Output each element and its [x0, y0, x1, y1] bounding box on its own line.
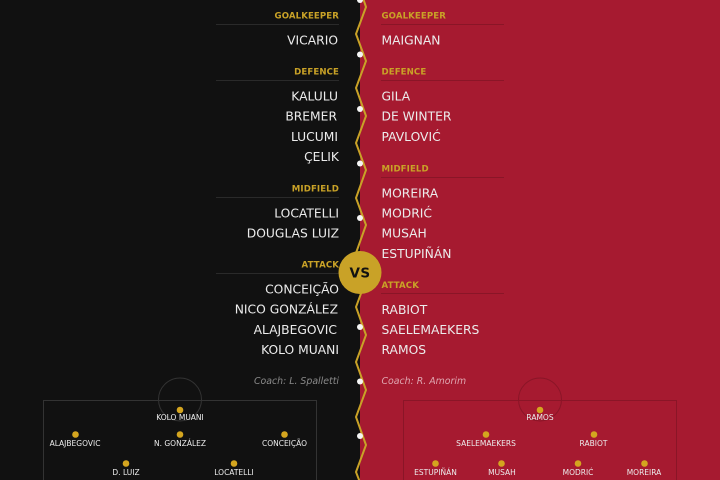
player marker: Ramos: RAMOS	[526, 413, 554, 422]
player marker: D. Luiz: D. LUIZ	[112, 468, 140, 477]
players: right midfield	[382, 186, 451, 261]
players: left defence	[285, 90, 340, 164]
players: right attack: RAMOS	[382, 343, 426, 357]
players: right attack: RABIOT	[382, 303, 428, 317]
player marker: Saelemaekers: SAELEMAEKERS	[456, 439, 516, 448]
players: left defence: LUCUMI	[291, 130, 338, 144]
coach: left: Coach: L. Spalletti	[254, 376, 339, 387]
left team lineup list	[216, 12, 340, 387]
VS badge: VS	[350, 266, 370, 282]
players: right midfield: MOREIRA	[382, 186, 439, 200]
players: right defence: GILA	[382, 90, 411, 104]
players: right attack: SAELEMAEKERS	[382, 323, 480, 337]
heading: defence right: DEFENCE	[382, 68, 426, 78]
player marker: Moreira	[627, 460, 662, 477]
players: right attack	[382, 303, 480, 357]
players: left defence: KALULU	[291, 90, 338, 104]
heading: attack right: ATTACK	[382, 281, 419, 291]
player marker: Estupiñán	[414, 460, 457, 477]
players: left midfield	[247, 206, 339, 240]
player marker: Musah	[488, 460, 516, 477]
player: Maignan: MAIGNAN	[382, 34, 440, 48]
player marker: Kolo Muani: KOLO MUANI	[156, 413, 204, 422]
players: right midfield: MODRIĆ	[382, 206, 432, 220]
heading: goalkeeper left: GOALKEEPER	[275, 12, 339, 22]
player marker: Musah: MUSAH	[488, 468, 516, 477]
VS badge	[338, 251, 382, 294]
players: left attack: KOLO MUANI	[261, 343, 339, 357]
zigzag centre divider	[356, 0, 366, 480]
player marker: Rabiot: RABIOT	[580, 439, 608, 448]
player marker: Moreira: MOREIRA	[627, 468, 662, 477]
players: left attack: ALAJBEGOVIC	[254, 323, 337, 337]
players: left attack: NICO GONZÁLEZ	[235, 302, 338, 316]
player marker: Rabiot	[580, 431, 608, 448]
heading: midfield left: MIDFIELD	[292, 184, 339, 194]
player marker: Locatelli	[214, 460, 254, 477]
players: left midfield: LOCATELLI	[274, 206, 339, 220]
player marker: Conceição	[262, 431, 307, 448]
right formation pitch	[404, 378, 676, 480]
player marker: N. González: N. GONZÁLEZ	[154, 439, 206, 448]
player marker: Saelemaekers	[456, 431, 516, 448]
players: right defence	[382, 90, 452, 144]
player marker: Conceição: CONCEIÇÃO	[262, 439, 307, 448]
player marker: D. Luiz	[112, 460, 140, 477]
players: right defence: DE WINTER	[382, 110, 452, 124]
players: right midfield: ESTUPIÑÁN	[382, 246, 451, 261]
heading: defence left: DEFENCE	[294, 68, 339, 78]
player: Vicario: VICARIO	[287, 34, 338, 48]
player marker: Modrić	[563, 460, 593, 477]
players: left attack: CONCEIÇÃO	[265, 282, 339, 296]
player marker: Alajbegovic	[50, 431, 100, 448]
left formation pitch	[44, 378, 316, 480]
divider dots	[357, 0, 363, 439]
player marker: Modrić: MODRIĆ	[563, 468, 593, 477]
players: right midfield: MUSAH	[382, 226, 427, 240]
player marker: Ramos	[526, 407, 554, 422]
heading: attack left: ATTACK	[302, 260, 339, 270]
heading: goalkeeper right: GOALKEEPER	[382, 12, 446, 22]
player marker: Locatelli: LOCATELLI	[214, 468, 254, 477]
players: right defence: PAVLOVIĆ	[382, 129, 441, 144]
panel: left team background	[0, 0, 360, 480]
players: left attack	[235, 282, 339, 357]
coach: right: Coach: R. Amorim	[382, 376, 466, 387]
players: left defence: BREMER	[285, 110, 337, 124]
heading: midfield right: MIDFIELD	[382, 164, 429, 174]
players: left midfield: DOUGLAS LUIZ	[247, 226, 339, 240]
players: left defence: ÇELIK	[304, 150, 340, 164]
right team lineup list	[381, 12, 504, 387]
player marker: N. González	[154, 431, 206, 448]
player marker: Kolo Muani	[156, 407, 204, 422]
player marker: Estupiñán: ESTUPIÑÁN	[414, 468, 457, 477]
panel: right team background	[360, 0, 720, 480]
player marker: Alajbegovic: ALAJBEGOVIC	[50, 439, 100, 448]
